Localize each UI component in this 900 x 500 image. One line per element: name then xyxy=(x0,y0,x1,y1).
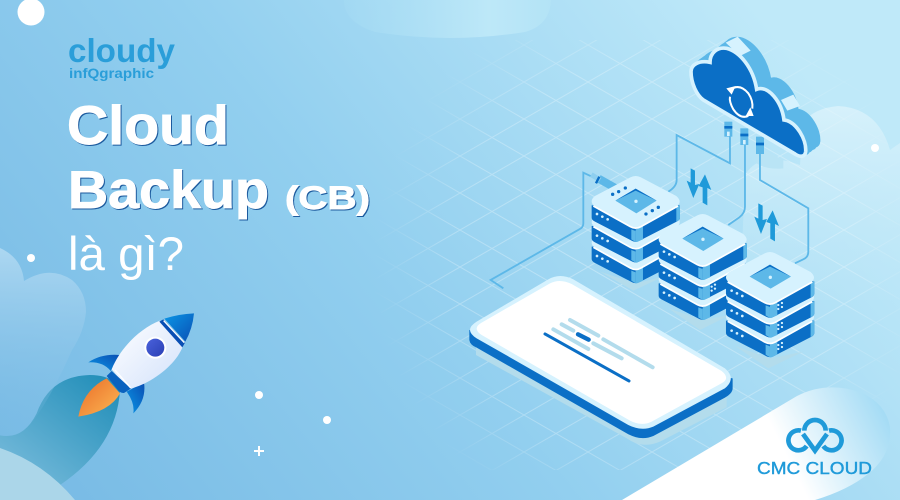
port blocks xyxy=(777,302,783,350)
rocket right fin xyxy=(127,382,144,413)
logo: cloudy infographic: infQgraphic xyxy=(69,66,155,81)
CMC Cloud logo xyxy=(757,420,872,478)
arrows: second pair xyxy=(754,203,779,241)
rocket nose band xyxy=(159,319,185,347)
vents xyxy=(611,186,660,216)
background cloud: left xyxy=(0,248,86,436)
rocket nose xyxy=(164,313,194,342)
arrows: first pair xyxy=(687,168,711,205)
port blocks xyxy=(710,283,716,292)
screen xyxy=(750,265,791,289)
logo: cloudy infographic: cloudy xyxy=(68,32,176,69)
logo wordmark: CMC CLOUD xyxy=(757,458,872,478)
device rim xyxy=(470,276,731,429)
title: (CB) xyxy=(285,180,370,216)
rocket xyxy=(78,313,194,417)
server stack 3 xyxy=(726,252,814,357)
screen xyxy=(615,189,657,213)
status lights xyxy=(596,213,609,263)
sync icon xyxy=(726,86,754,117)
server shadows xyxy=(600,272,803,368)
wire: cloud to third server xyxy=(760,153,808,263)
rocket flame xyxy=(78,378,120,417)
rocket window xyxy=(144,337,166,359)
server stack 2 xyxy=(659,214,747,320)
background cloud: right xyxy=(740,106,900,300)
data center illustration xyxy=(469,133,814,445)
rocket tail band xyxy=(107,371,131,393)
logo mark xyxy=(788,420,842,451)
device screen xyxy=(477,281,726,424)
rocket left fin xyxy=(88,355,120,371)
cloud illustration xyxy=(691,37,819,156)
connector plug on first server xyxy=(591,175,615,188)
title: Backup xyxy=(68,161,269,220)
background cloud: top xyxy=(344,0,551,38)
cloud front face xyxy=(691,48,806,156)
wire: cloud to first server xyxy=(668,133,730,192)
wire: cloud to second server xyxy=(728,143,745,225)
rocket tail stripe xyxy=(115,370,131,388)
title: Cloud xyxy=(67,94,229,156)
device shadow xyxy=(476,347,727,445)
title xyxy=(67,94,370,220)
cloud depth side xyxy=(694,38,819,154)
rocket body xyxy=(112,321,183,389)
screen xyxy=(682,227,724,251)
cloud depth highlights xyxy=(726,37,800,111)
device edge xyxy=(469,330,733,438)
hill: bottom right xyxy=(622,387,890,500)
cloud base shadow xyxy=(757,147,783,169)
rocket nose stripe xyxy=(164,321,184,343)
hill: bottom left xyxy=(0,448,75,500)
wire: first server to floor xyxy=(491,173,593,288)
server stack 1 xyxy=(592,176,680,283)
cloud connectors xyxy=(724,122,764,154)
subtitle: là gì? xyxy=(68,227,184,280)
device screen text lines xyxy=(545,320,653,381)
isometric floor grid xyxy=(397,40,888,470)
rocket smoke trail xyxy=(0,375,120,500)
status lights xyxy=(730,289,744,337)
status lights xyxy=(663,250,676,299)
